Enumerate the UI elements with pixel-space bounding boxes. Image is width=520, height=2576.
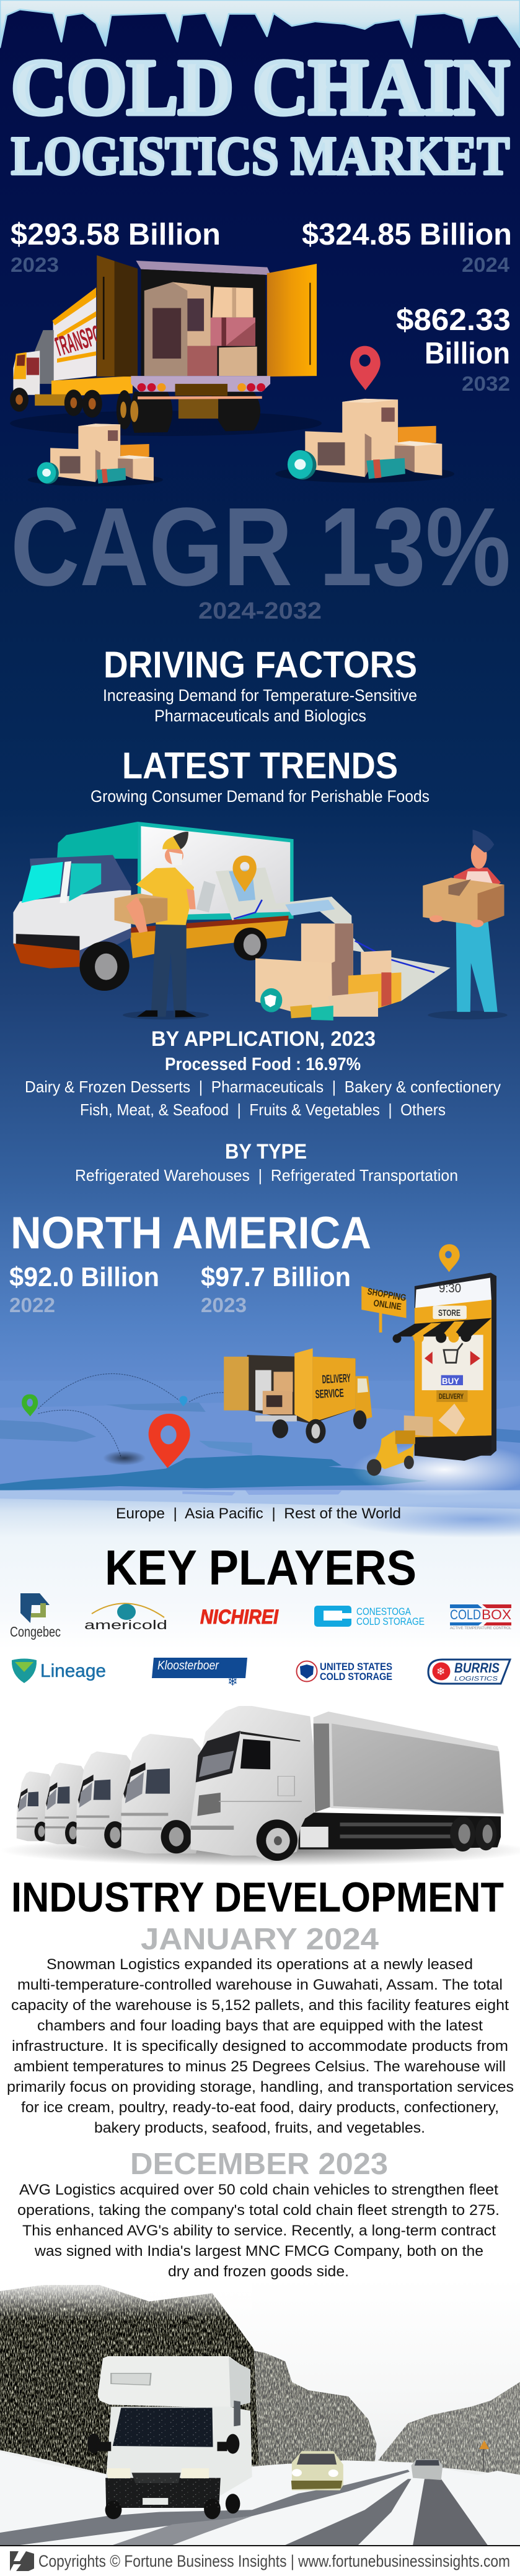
value 2032: Billion	[425, 337, 510, 370]
logo: Kloosterboer	[152, 1658, 247, 1689]
driving factors: DRIVING FACTORS	[104, 644, 417, 685]
development: January 2024: capacity of the warehouse is 5,152 pallets, and this facility features eight	[11, 1997, 509, 2014]
by application	[25, 1027, 501, 1119]
value 2024	[302, 218, 512, 276]
header: snow and icicles	[0, 0, 520, 48]
phone and truck labels: 9:30	[439, 1282, 461, 1295]
value 2032	[396, 303, 511, 395]
logo: Lineage: Lineage	[40, 1661, 106, 1681]
phone and truck labels: STORE	[438, 1308, 461, 1318]
logo: Kloosterboer: Kloosterboer	[157, 1659, 219, 1673]
development: January 2024	[7, 1923, 514, 2136]
value 2032: 2032	[462, 372, 510, 395]
driving factors: Pharmaceuticals and Biologics	[154, 707, 366, 725]
development: December 2023	[17, 2147, 500, 2280]
logo: Conestoga Cold Storage: CONESTOGA	[356, 1606, 412, 1617]
logo: Kloosterboer: ❄	[227, 1675, 238, 1689]
driving factors: Increasing Demand for Temperature-Sensitive	[103, 686, 417, 705]
by application: Dairy & Frozen Desserts | Pharmaceuticals | Bakery & confectionery	[25, 1077, 501, 1096]
value 2023: 2023	[11, 253, 59, 276]
phone and truck labels: SERVICE	[315, 1387, 344, 1401]
phone and truck labels: BUY	[442, 1376, 460, 1386]
logo: Nichirei: NICHIREI	[200, 1606, 279, 1628]
online delivery illustration	[22, 1244, 496, 1476]
CAGR period: 2024-2032	[198, 598, 322, 624]
by application: Fish, Meat, & Seafood | Fruits & Vegetables | Others	[80, 1100, 446, 1119]
driving factors	[103, 644, 417, 725]
text on truck: TRANSPORT	[51, 316, 118, 363]
logo: Americold: americold	[84, 1619, 167, 1632]
phone and truck labels: SHOPPING	[366, 1286, 407, 1303]
value 2024: $324.85 Billion	[302, 218, 512, 251]
logo: Burris Logistics: BURRIS	[454, 1660, 500, 1676]
logo: United States Cold Storage: COLD STORAGE	[320, 1671, 392, 1682]
development: January 2024: for ice cream, poultry, ready-to-eat food, dairy products, confectionery,	[21, 2099, 499, 2116]
icon: location pin	[350, 346, 381, 390]
development: January 2024: bakery products, seafood, fruits, and vegetables.	[94, 2120, 425, 2136]
illustration: delivery truck with courier and map	[13, 822, 508, 1020]
footer	[0, 2545, 520, 2576]
photo: snowy road with camper	[0, 2279, 520, 2545]
development: December 2023: This enhanced AVG's ability to service. Recently, a long-term contract	[22, 2222, 496, 2239]
illustration: left box pile	[28, 424, 163, 486]
logo: Congebec: Congebec	[10, 1624, 61, 1640]
logo: Coldbox: ACTIVE TEMPERATURE CONTROL	[450, 1627, 512, 1630]
development: January 2024: multi-temperature-controlled warehouse in Guwahati, Assam. The total	[17, 1977, 503, 1993]
value 2023: $293.58 Billion	[11, 218, 221, 251]
logo: United States Cold Storage: UNITED STATES	[320, 1661, 392, 1673]
illustration: right box pile	[275, 399, 454, 483]
logo: Burris Logistics	[428, 1660, 510, 1684]
title: Cold Chain: COLD CHAIN	[11, 43, 509, 131]
north america: $92.0 Billion	[9, 1262, 159, 1292]
latest trends	[90, 745, 430, 806]
north america: $97.7 Billion	[201, 1262, 351, 1292]
logo: Burris Logistics: ❄	[436, 1666, 445, 1677]
icon: Fortune Business Insights logo	[10, 2551, 34, 2571]
north america: 2022	[9, 1294, 55, 1316]
by type: Refrigerated Warehouses | Refrigerated Transportation	[75, 1166, 458, 1185]
development: January 2024: JANUARY 2024	[141, 1923, 379, 1956]
development: January 2024: chambers and four loading bays that are equipped with the latest	[37, 2017, 483, 2034]
by type: BY TYPE	[225, 1140, 307, 1164]
world map with water	[0, 1381, 520, 1538]
phone and truck labels: DELIVERY	[439, 1392, 464, 1401]
logo: Americold	[84, 1603, 167, 1632]
by application: BY APPLICATION, 2023	[151, 1027, 376, 1051]
logo: Congebec	[10, 1593, 61, 1640]
development: December 2023: DECEMBER 2023	[130, 2147, 388, 2181]
value 2023	[11, 218, 221, 276]
development: December 2023: dry and frozen goods side.	[168, 2263, 349, 2280]
phone and truck labels	[315, 1282, 464, 1401]
other regions: Europe | Asia Pacific | Rest of the World	[116, 1505, 401, 1522]
latest trends: LATEST TRENDS	[122, 745, 398, 786]
development: January 2024: primarily focus on providing storage, handling, and transportation services	[7, 2079, 514, 2095]
phone and truck labels: ONLINE	[373, 1298, 402, 1312]
by type	[75, 1140, 458, 1185]
development: January 2024: Snowman Logistics expanded its operations at a newly leased	[46, 1956, 473, 1973]
logo: Burris Logistics: LOGISTICS	[454, 1676, 498, 1682]
phone and truck labels: DELIVERY	[322, 1372, 351, 1386]
north america: 2023	[201, 1294, 247, 1316]
value 2024: 2024	[462, 253, 510, 276]
latest trends: Growing Consumer Demand for Perishable Foods	[90, 787, 430, 806]
by application: Processed Food : 16.97%	[165, 1055, 361, 1074]
development: December 2023: operations, taking the company's total cold chain fleet strength to 275.	[17, 2202, 500, 2219]
development: December 2023: AVG Logistics acquired over 50 cold chain vehicles to strengthen fleet	[19, 2182, 498, 2198]
north america	[9, 1208, 371, 1316]
key players heading: KEY PLAYERS	[105, 1540, 416, 1595]
development: January 2024: ambient temperatures to minus 25 Degrees Celsius. The warehouse will	[14, 2058, 506, 2075]
logo: Conestoga Cold Storage	[314, 1606, 425, 1627]
logo: Lineage	[12, 1658, 106, 1683]
development: January 2024: infrastructure. It is specifically designed to accommodate products from	[12, 2038, 508, 2055]
development: December 2023: was signed with India's largest MNC FMCG Company, both on the	[34, 2243, 483, 2260]
photo: fleet of white trucks	[0, 1706, 520, 1866]
logo: Conestoga Cold Storage: COLD STORAGE	[356, 1616, 425, 1627]
logo: Coldbox: BOX	[482, 1607, 511, 1622]
north america: NORTH AMERICA	[11, 1208, 371, 1258]
logo: Coldbox: COLD	[450, 1607, 481, 1622]
value 2032: $862.33	[396, 303, 511, 337]
illustration: open cargo truck	[10, 255, 322, 436]
logo: Coldbox	[450, 1604, 512, 1630]
logo: United States Cold Storage	[296, 1661, 392, 1682]
